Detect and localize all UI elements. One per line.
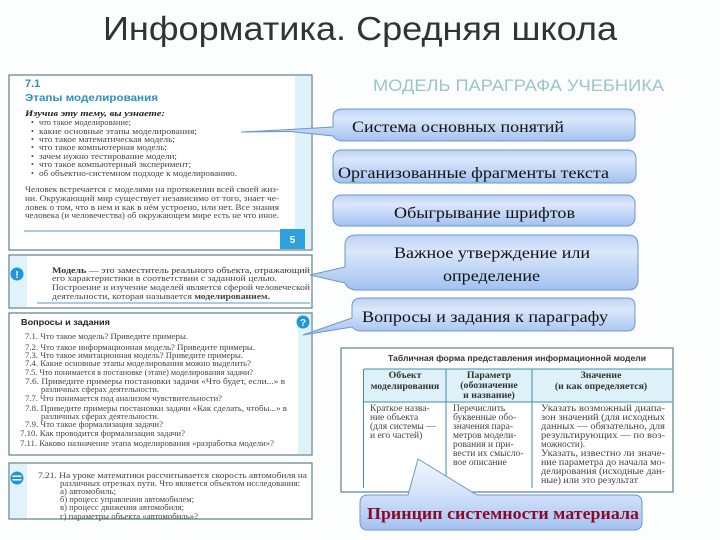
column 3 text: данных — обязательно, для <box>541 421 666 432</box>
questions list: 7.10. Как проводится формализация задачи? <box>20 429 185 438</box>
table title: Табличная форма представления информационной модели <box>388 354 646 363</box>
table header labels: и название) <box>463 390 515 401</box>
goals list: зачем нужно тестирование модели; <box>39 152 177 161</box>
exercise text <box>38 471 308 521</box>
column 1 text: и его частей) <box>370 430 422 441</box>
column 1 text: Краткое назва- <box>370 404 430 414</box>
exercise text: различных отрезках пути. Что является объектом исследования: <box>60 479 300 488</box>
callout: important statement or definition: Важное утверждение или <box>394 245 590 262</box>
callout: playing with fonts <box>333 195 635 226</box>
goals list: что такое моделирование; <box>39 118 131 127</box>
table header labels: Значение <box>581 370 622 381</box>
goals list: какие основные этапы моделирования; <box>39 127 197 136</box>
questions list: 7.3. Что такое имитационная модель? Приведите примеры. <box>25 351 243 360</box>
questions list: 7.8. Приведите примеры постановки задачи «Как сделать, чтобы...» в <box>25 404 287 413</box>
column 2 text: буквенные обо- <box>453 412 516 423</box>
questions list: различных сферах деятельности. <box>41 412 159 421</box>
section number: 7.1 <box>25 78 40 90</box>
intro paragraph: ловек о том, что в нем и как в нём устроено, или нет. Все знания <box>25 203 279 212</box>
column 3 text: Указать возможный диапа- <box>541 403 665 414</box>
panel: exercise <box>9 463 312 521</box>
column 2 text: метров модели- <box>453 431 516 441</box>
questions list: 7.11. Каково назначение этапа моделирования «разработка модели»? <box>20 439 274 448</box>
exercise text: 7.21. На уроке математики рассчитывается скорость автомобиля на <box>38 471 308 480</box>
definition text <box>52 266 311 301</box>
questions list: 7.5. Что понимается в постановке (этапе) моделирования задачи? <box>25 368 253 377</box>
goals list: что такое компьютерный эксперимент; <box>39 160 191 169</box>
page number <box>280 229 305 249</box>
goals list: • <box>31 152 34 161</box>
title: Информатика. Средняя школа <box>103 10 618 47</box>
callout: questions and tasks for the paragraph <box>303 298 635 335</box>
callout: system of basic concepts <box>241 109 635 141</box>
table header labels: (и как определяется) <box>555 381 647 392</box>
callout: questions and tasks for the paragraph: Вопросы и задания к параграфу <box>362 309 608 326</box>
column 2 text: Перечислить <box>453 404 506 414</box>
callout: playing with fonts: Обыгрывание шрифтов <box>394 205 576 222</box>
questions list: 7.2. Что такое информационная модель? Приведите примеры. <box>25 343 255 352</box>
callout: system of basic concepts: Система основных понятий <box>352 119 564 136</box>
panel: table form of information model <box>341 348 673 492</box>
goals list: • <box>31 160 34 169</box>
questions list: 7.1. Что такое модель? Приведите примеры. <box>25 332 188 341</box>
table header band <box>364 369 672 402</box>
icon: exclamation: ! <box>15 270 19 281</box>
intro paragraph: ни. Окружающий мир существует независимо от того, знает че- <box>25 194 279 203</box>
icon: question mark <box>296 316 310 329</box>
table header labels: Параметр <box>467 370 512 381</box>
panel: questions and tasks <box>9 313 312 455</box>
definition text: деятельности, которая называется моделированием. <box>52 292 270 301</box>
callout: principle of systematic material <box>360 459 642 530</box>
intro paragraph: человека (и человечества) об окружающем мире есть не что иное. <box>25 211 279 220</box>
column 1 text <box>370 404 436 441</box>
table header labels <box>371 370 647 401</box>
callout: organized text fragments: Организованные фрагменты текста <box>338 165 609 182</box>
column 3 text: Указать, известно ли значе- <box>541 449 665 459</box>
column 2 text: значения пара- <box>453 422 513 432</box>
questions list: 7.7. Что понимается под анализом чувствительности? <box>25 394 222 403</box>
goals list: • <box>31 143 34 152</box>
intro paragraph <box>25 185 279 220</box>
goals list <box>31 118 237 178</box>
questions list: 7.4. Какие основные этапы моделирования можно выделить? <box>25 359 251 368</box>
table header labels: (обозначение <box>460 380 518 391</box>
column 3 text: делирования (исходные дан- <box>541 466 665 477</box>
column 3 text: ные) или это результат <box>541 475 639 486</box>
questions list: 7.9. Что такое формализация задачи? <box>25 420 163 429</box>
column 1 text: ние объекта <box>370 412 419 423</box>
column 3 text: результирующих — по воз- <box>541 431 665 441</box>
definition text: Модель — это заместитель реального объекта, отражающий <box>52 266 311 275</box>
icon: exclamation <box>10 268 24 281</box>
table header labels: Объект <box>389 370 422 381</box>
callout: important statement or definition: определение <box>443 268 540 285</box>
questions list: различных сферах деятельности. <box>41 385 159 394</box>
column 2 text: вое описание <box>453 458 507 468</box>
exercise text: а) автомобиль; <box>60 487 116 496</box>
goals list: • <box>31 135 34 144</box>
intro paragraph: Человек встречается с моделями на протяжении всей своей жиз- <box>25 185 279 194</box>
icon: exercise marker <box>10 472 24 484</box>
goals list: • <box>31 118 34 127</box>
goals list: что такое математическая модель; <box>39 135 175 144</box>
goals lead-in: Изучив эту тему, вы узнаете: <box>24 108 165 118</box>
page number: 5 <box>290 235 296 246</box>
exercise text: б) процесс управления автомобилем; <box>60 495 194 504</box>
column 2 text <box>453 404 523 468</box>
column 2 text: рования и при- <box>453 440 514 450</box>
column 1 text: (для системы — <box>370 421 436 432</box>
column 3 text <box>541 403 666 486</box>
questions list: 7.6. Приведите примеры постановки задачи «Что будет, если...» в <box>25 377 285 386</box>
goals list: об объектно-системном подходе к моделированию. <box>39 169 237 178</box>
goals list: что такое компьютерная модель; <box>39 143 167 152</box>
icon: question mark: ? <box>300 318 306 329</box>
goals list: • <box>31 169 34 178</box>
callout: important statement or definition <box>310 235 638 290</box>
definition text: Построение и изучение моделей является сферой человеческой <box>52 283 311 292</box>
panel: textbook section opening <box>9 75 312 250</box>
goals list: • <box>31 127 34 136</box>
questions heading: Вопросы и задания <box>21 317 110 327</box>
column 3 text: можности). <box>541 439 585 450</box>
exercise text: г) параметры объекта «автомобиль»? <box>60 512 198 521</box>
section heading: Этапы моделирования <box>25 92 158 104</box>
column 3 text: зон значений (для исходных <box>541 412 665 423</box>
callout: organized text fragments <box>333 150 636 183</box>
panel: definition <box>9 255 312 308</box>
exercise text: в) процесс движения автомобиля; <box>60 503 184 512</box>
column 2 text: вести их смысло- <box>453 449 523 459</box>
definition text: его характеристики в соответствии с заданной целью. <box>52 274 277 283</box>
subtitle: paragraph model: МОДЕЛЬ ПАРАГРАФА УЧЕБНИКА <box>373 77 664 95</box>
questions list <box>20 332 287 448</box>
table header labels: моделирования <box>371 381 440 392</box>
column 3 text: ние параметра до начала мо- <box>541 458 665 468</box>
callout: principle of systematic material: Принцип системности материала <box>367 504 640 523</box>
